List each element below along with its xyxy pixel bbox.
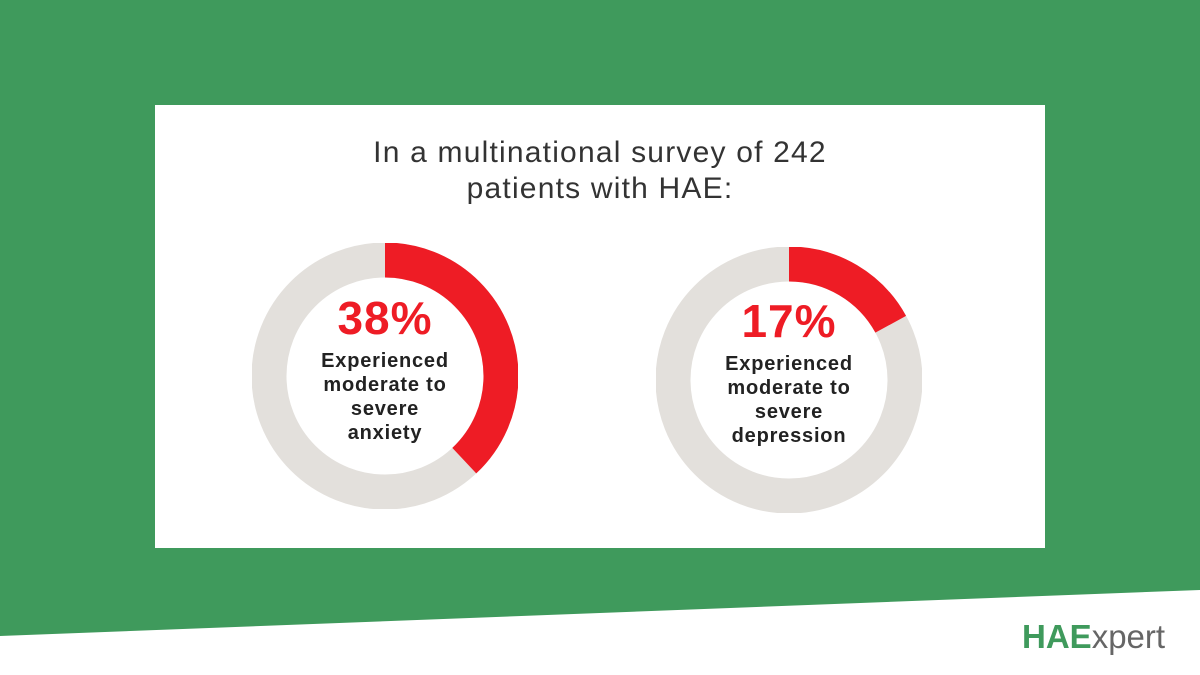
- title: [373, 136, 827, 205]
- title: patients with HAE:: [467, 172, 733, 205]
- label: anxiety: anxiety: [348, 422, 422, 444]
- label: depression: severe: [755, 401, 823, 423]
- label: anxiety: severe: [351, 398, 419, 420]
- stat: 38%: 38%: [337, 292, 433, 344]
- label: depression: depression: [732, 425, 846, 447]
- label: anxiety: [321, 350, 449, 444]
- logo: HAExpert: [1022, 618, 1165, 655]
- panel: survey: [155, 105, 1045, 548]
- label: anxiety: moderate to: [323, 374, 447, 396]
- stat: 17%: 17%: [741, 295, 837, 347]
- label: anxiety: Experienced: [321, 350, 449, 372]
- donut chart: depression: [656, 247, 922, 513]
- label: depression: moderate to: [727, 377, 851, 399]
- title: In a multinational survey of 242: [373, 136, 827, 169]
- label: depression: [725, 353, 853, 447]
- label: depression: Experienced: [725, 353, 853, 375]
- donut chart: anxiety: [252, 243, 518, 509]
